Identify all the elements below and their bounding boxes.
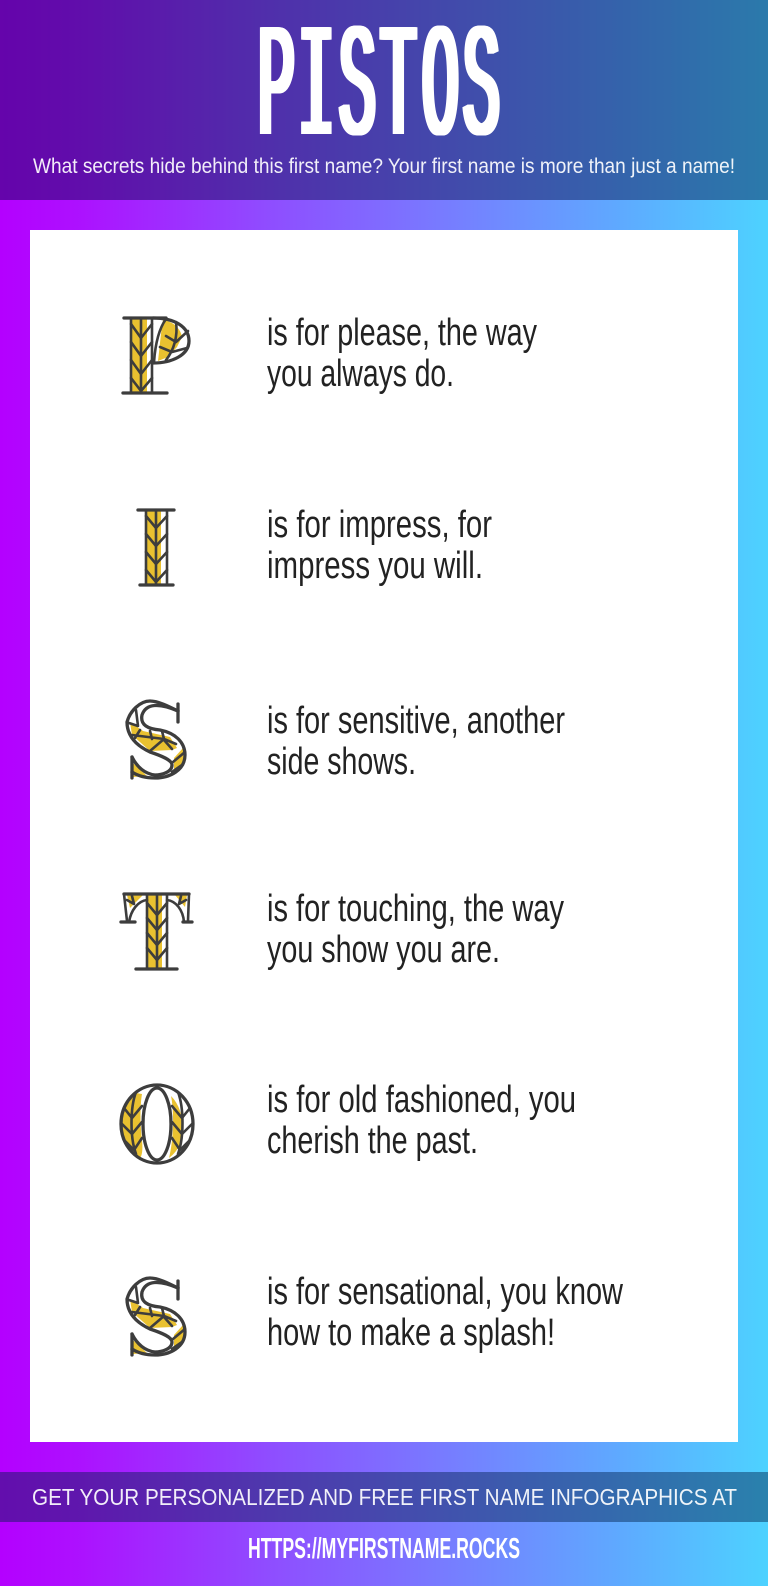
row: T bbox=[121, 888, 564, 971]
title: O bbox=[419, 1, 456, 184]
text: I line bbox=[267, 504, 492, 587]
header band bbox=[0, 0, 768, 200]
text: P line bbox=[267, 312, 537, 395]
text: O line: cherish the past. bbox=[267, 1120, 478, 1162]
text: I line: impress you will. bbox=[267, 545, 483, 587]
text: P line: is for please, the way bbox=[267, 312, 537, 354]
text: S second line: how to make a splash! bbox=[267, 1312, 555, 1354]
icon: letter T bbox=[121, 894, 192, 969]
panel: white content card bbox=[30, 230, 738, 1442]
text: S second line: is for sensational, you know bbox=[267, 1271, 623, 1313]
title: S bbox=[336, 1, 374, 184]
text: O line: is for old fashioned, you bbox=[267, 1079, 576, 1121]
title: T bbox=[377, 1, 415, 184]
text: P line: you always do. bbox=[267, 353, 454, 395]
footer url: HTTPS://MYFIRSTNAME.ROCKS bbox=[248, 1533, 520, 1565]
title: S bbox=[460, 1, 498, 184]
text: T line: you show you are. bbox=[267, 929, 500, 971]
text: S line: is for sensitive, another bbox=[267, 700, 565, 742]
text: S line: side shows. bbox=[267, 741, 416, 783]
icon: letter S bbox=[127, 701, 185, 778]
row: S second bbox=[127, 1271, 623, 1355]
text: I line: is for impress, for bbox=[267, 504, 492, 546]
footer band bbox=[0, 1472, 768, 1522]
icon: letter S bbox=[127, 1278, 185, 1355]
text: T line bbox=[267, 888, 564, 971]
title: I bbox=[295, 1, 333, 184]
text: O line bbox=[267, 1079, 576, 1162]
row: P bbox=[123, 312, 537, 395]
title bbox=[255, 1, 500, 184]
icon: letter I bbox=[138, 510, 174, 585]
row: S bbox=[127, 700, 565, 783]
icon: letter O bbox=[121, 1085, 193, 1163]
row: O bbox=[121, 1079, 576, 1163]
text: S second line bbox=[267, 1271, 623, 1354]
icon: letter P bbox=[123, 318, 189, 393]
text: T line: is for touching, the way bbox=[267, 888, 564, 930]
title: P bbox=[255, 1, 292, 184]
text: S line bbox=[267, 700, 565, 783]
row: I bbox=[138, 504, 492, 587]
